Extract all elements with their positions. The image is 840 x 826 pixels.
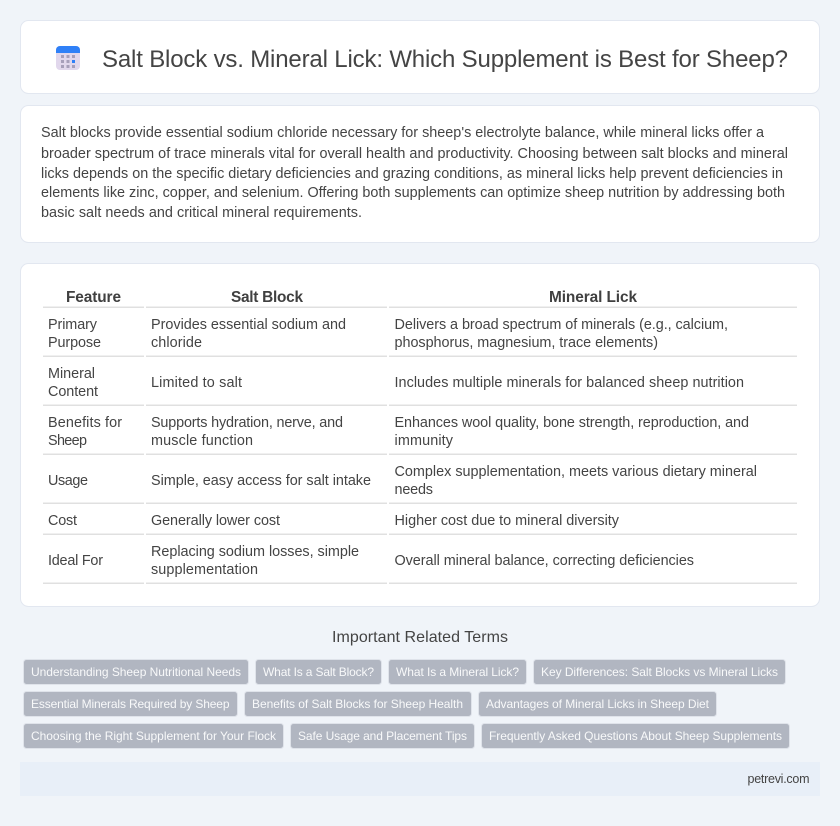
- table header row: [43, 289, 797, 308]
- row: cost: Higher cost due to mineral diversity: [394, 513, 620, 529]
- tag row 1: Understanding Sheep Nutritional Needs: [31, 665, 241, 679]
- tag row 2: Essential Minerals Required by Sheep: [31, 697, 230, 711]
- intro paragraph: elements like zinc, copper, and selenium. Offering both supplements can optimize sheep nutrition by addressing both: [41, 185, 785, 201]
- row: primary purpose: phosphorus, magnesium, trace elements): [394, 335, 658, 351]
- intro paragraph: Salt blocks provide essential sodium chloride necessary for sheep's electrolyte balance, while mineral licks offer a: [41, 125, 764, 141]
- row: benefits for sheep: Benefits for: [48, 415, 122, 431]
- row: mineral content: [43, 366, 797, 406]
- row: benefits for sheep: [43, 415, 797, 455]
- row: ideal for: Replacing sodium losses, simple: [151, 544, 359, 560]
- row: primary purpose: Primary: [48, 317, 98, 333]
- tag row 1: What Is a Mineral Lick?: [396, 665, 519, 679]
- intro paragraph: licks depends on the specific dietary deficiencies and grazing conditions, as mineral licks help prevent deficiencies in: [41, 166, 783, 182]
- tag row 3: [24, 724, 790, 748]
- row: benefits for sheep: immunity: [394, 433, 454, 449]
- panel: comparison table: [20, 264, 820, 606]
- table header row: Mineral Lick: [549, 289, 637, 306]
- intro paragraph: [41, 125, 788, 221]
- row: ideal for: [43, 544, 797, 584]
- tag row 2: [24, 692, 716, 716]
- row: cost: Generally lower cost: [151, 513, 280, 529]
- row: usage: Simple, easy access for salt intake: [151, 473, 371, 489]
- panel: related term tags: [24, 660, 790, 748]
- row: usage: Complex supplementation, meets various dietary mineral: [394, 464, 757, 480]
- row: mineral content: Content: [48, 384, 98, 400]
- row: mineral content: Mineral: [48, 366, 95, 382]
- footer bar: petrevi.com: [748, 772, 810, 786]
- row: primary purpose: Purpose: [48, 335, 101, 351]
- icon: calendar: [56, 46, 80, 70]
- row: primary purpose: Provides essential sodium and: [151, 317, 346, 333]
- tag row 3: Choosing the Right Supplement for Your Flock: [31, 729, 277, 743]
- panel: title header: [20, 20, 820, 94]
- table header row: Salt Block: [231, 289, 303, 306]
- row: ideal for: Overall mineral balance, correcting deficiencies: [394, 553, 694, 569]
- tag row 2: Benefits of Salt Blocks for Sheep Health: [252, 697, 463, 711]
- row: mineral content: Includes multiple minerals for balanced sheep nutrition: [394, 375, 744, 391]
- tag row 1: Key Differences: Salt Blocks vs Mineral Licks: [541, 665, 778, 679]
- heading: important related terms: Important Related Terms: [332, 629, 508, 646]
- intro paragraph: broader spectrum of trace minerals vital for overall health and productivity. Choosing between salt blocks and mineral: [41, 146, 788, 162]
- row: primary purpose: [43, 317, 797, 357]
- row: cost: [43, 513, 797, 535]
- intro paragraph: basic salt needs and critical mineral requirements.: [41, 205, 362, 221]
- panel: introduction: [20, 106, 820, 242]
- row: usage: Usage: [48, 473, 88, 489]
- tag row 2: Advantages of Mineral Licks in Sheep Diet: [486, 697, 710, 711]
- row: usage: [43, 464, 797, 504]
- row: benefits for sheep: Enhances wool quality, bone strength, reproduction, and: [394, 415, 749, 431]
- row: primary purpose: Delivers a broad spectrum of minerals (e.g., calcium,: [394, 317, 728, 333]
- row: ideal for: supplementation: [151, 562, 258, 578]
- tag row 3: Frequently Asked Questions About Sheep Supplements: [489, 729, 782, 743]
- row: primary purpose: chloride: [151, 335, 202, 351]
- row: benefits for sheep: muscle function: [151, 433, 253, 449]
- row: mineral content: Limited to salt: [151, 375, 242, 391]
- footer bar: [20, 762, 820, 796]
- tag row 1: What Is a Salt Block?: [263, 665, 374, 679]
- tag row 1: [24, 660, 786, 684]
- row: cost: Cost: [48, 513, 77, 529]
- row: usage: needs: [394, 482, 433, 498]
- tag row 3: Safe Usage and Placement Tips: [298, 729, 467, 743]
- row: benefits for sheep: Supports hydration, nerve, and: [151, 415, 343, 431]
- row: ideal for: Ideal For: [48, 553, 103, 569]
- table header row: Feature: [66, 289, 121, 306]
- row: benefits for sheep: Sheep: [48, 433, 87, 449]
- title: Salt Block vs. Mineral Lick: Which Supplement is Best for Sheep?: [102, 46, 788, 73]
